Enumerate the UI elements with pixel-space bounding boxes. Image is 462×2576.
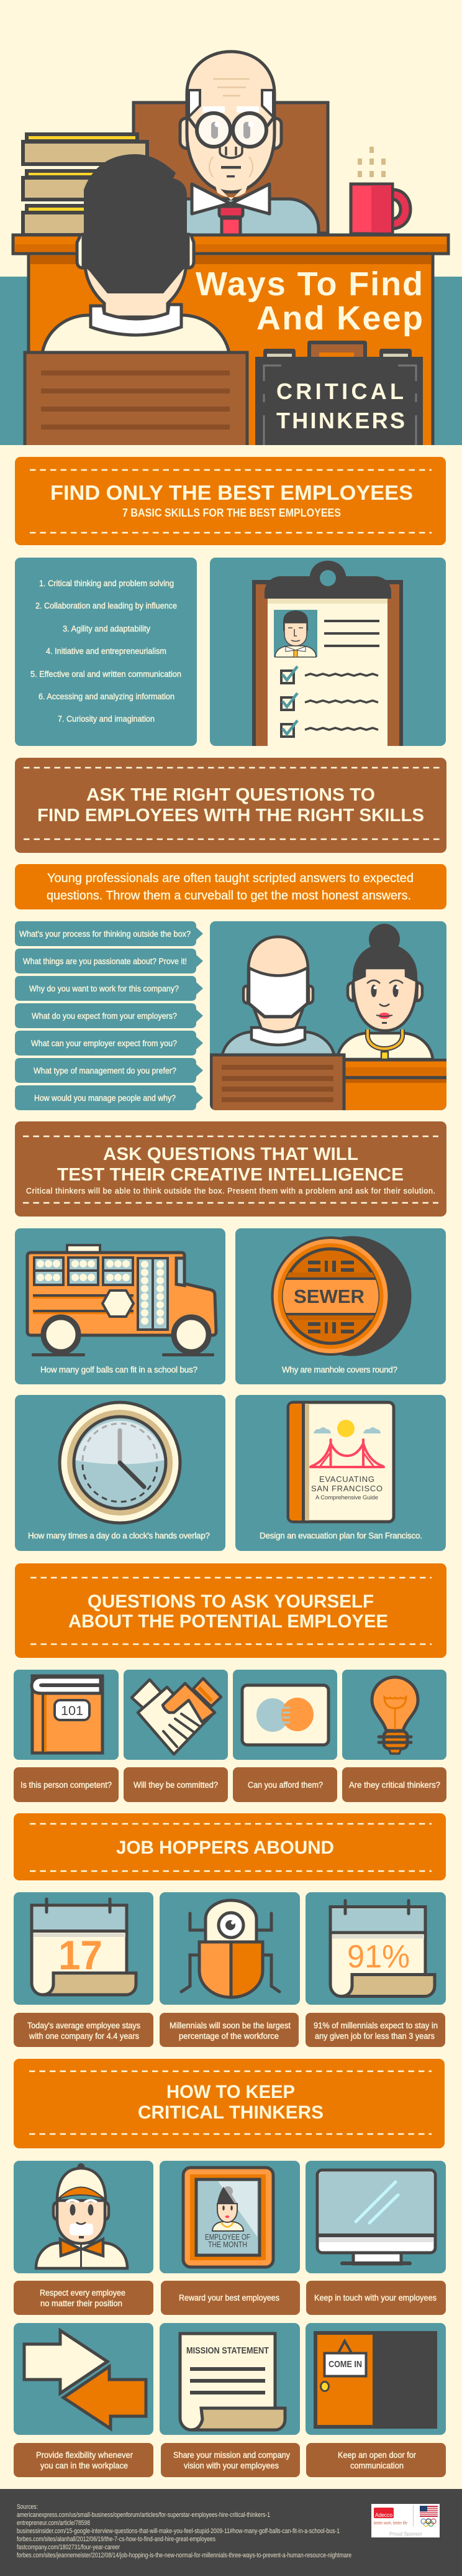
caption: Respect every employee xyxy=(40,2288,125,2298)
panel: seven skills list: 2. Collaboration and leading by influence xyxy=(35,601,177,610)
stat captions row xyxy=(14,2013,445,2047)
caption: Design an evacuation plan for San Francisco. xyxy=(260,1531,422,1540)
caption: with one company for 4.4 years xyxy=(29,2031,139,2041)
checklist xyxy=(281,666,378,737)
question bubble xyxy=(15,1031,203,1056)
icon: boss shirt xyxy=(183,199,319,235)
icon: candidate with bald head xyxy=(222,937,334,1055)
sources: forbes.com/sites/jeannemeister/2012/08/14/job-hopping-is-the-new-normal-for-millennials-three-ways-to-prevent-a-human-resource-nightmare xyxy=(17,2552,351,2559)
sponsor logo: better work, better life xyxy=(374,2521,407,2526)
heading: FIND ONLY THE BEST EMPLOYEES xyxy=(50,481,413,504)
caption xyxy=(14,1767,119,1802)
icon: clipboard clip xyxy=(265,561,391,599)
icon: interview desk xyxy=(345,1059,450,1111)
sources: fastcompany.com/1802731/four-year-career xyxy=(17,2544,120,2551)
icon: light bulb xyxy=(372,1677,418,1754)
question bubble: What's your process for thinking outside the box? xyxy=(19,929,191,939)
panel: school bus question xyxy=(15,1228,225,1384)
résumé lines xyxy=(324,620,379,647)
icon: guide book: A Comprehensive Guide xyxy=(315,1494,378,1501)
caption xyxy=(306,2281,446,2315)
callout: curveball: Young professionals are often taught scripted answers to expected xyxy=(47,872,414,885)
panel: clipboard xyxy=(210,558,446,748)
question list xyxy=(15,921,203,1110)
sources: forbes.com/sites/alanhall/2012/06/19/the-7-cs-how-to-find-and-hire-great-employees xyxy=(17,2536,215,2543)
caption: Millennials will soon be the largest xyxy=(170,2021,291,2030)
heading: ABOUT THE POTENTIAL EMPLOYEE xyxy=(68,1611,388,1632)
caption xyxy=(161,2443,300,2477)
sponsor logo: Adecco xyxy=(375,2512,392,2518)
callout: curveball xyxy=(15,864,446,909)
panel: clock question xyxy=(15,1395,225,1551)
subheading: 7 BASIC SKILLS FOR THE BEST EMPLOYEES xyxy=(122,507,341,519)
panel: critical thinkers bulb xyxy=(342,1670,446,1760)
question bubble: What type of management do you prefer? xyxy=(34,1066,176,1075)
icon: chair back xyxy=(211,1055,344,1112)
caption xyxy=(306,2443,446,2477)
question bubble xyxy=(15,949,203,973)
icon: employee of the month frame xyxy=(183,2168,273,2267)
heading: QUESTIONS TO ASK YOURSELF xyxy=(88,1591,374,1612)
panel: flexibility xyxy=(14,2323,153,2435)
icon: calendar: 17 xyxy=(58,1932,102,1978)
icon: employee of the month frame: THE MONTH xyxy=(208,2240,247,2249)
question bubble: What do you expect from your employers? xyxy=(32,1011,177,1021)
briefcase label xyxy=(276,379,405,433)
panel: respect xyxy=(14,2161,153,2273)
panel: seven skills list: 3. Agility and adaptability xyxy=(63,624,150,633)
panel: seven skills list: 7. Curiosity and imagination xyxy=(58,714,155,724)
panel: job hoppers abound xyxy=(14,1813,446,1880)
panel: seven skills list: 5. Effective oral and written communication xyxy=(30,669,181,679)
caption boxes row xyxy=(14,1767,446,1802)
sources: americanexpress.com/us/small-business/openforum/articles/for-superstar-employees-hire-critical-thinkers-1 xyxy=(17,2511,270,2519)
caption: Today's average employee stays xyxy=(27,2021,140,2030)
caption: Why are manhole covers round? xyxy=(282,1365,397,1374)
caption: Keep an open door for xyxy=(338,2450,416,2460)
icon: school bus xyxy=(27,1245,216,1356)
icon: candidate chair back xyxy=(25,352,247,452)
panel: find only the best employees xyxy=(15,457,446,545)
question bubble xyxy=(15,976,203,1001)
panel: afford xyxy=(233,1670,337,1760)
question bubble xyxy=(15,1058,203,1083)
caption: you can in the workplace xyxy=(40,2460,128,2470)
panel: ask the right questions xyxy=(15,758,446,853)
captions row xyxy=(14,2281,446,2315)
callout: curveball: questions. Throw them a curveball to get the most honest answers. xyxy=(47,889,411,903)
icon: guide book: SAN FRANCISCO xyxy=(311,1484,383,1493)
captions row xyxy=(14,2443,446,2477)
question bubble: How would you manage people and why? xyxy=(34,1093,176,1103)
panel: competent xyxy=(14,1670,119,1760)
caption: Are they critical thinkers? xyxy=(349,1780,440,1790)
caption xyxy=(161,2281,300,2315)
panel: calendar 91% xyxy=(306,1892,446,2005)
panel: reward xyxy=(160,2161,300,2273)
icon: boss chair xyxy=(134,103,328,233)
icon: calendar xyxy=(32,1899,136,1995)
question bubble: What things are you passionate about? Prove it! xyxy=(23,957,187,966)
caption: Reward your best employees xyxy=(179,2293,279,2302)
sources xyxy=(17,2503,351,2559)
sponsor logo: Proud Sponsor xyxy=(389,2531,422,2537)
heading xyxy=(37,785,424,826)
icon: 101 book xyxy=(32,1676,102,1753)
panel: san francisco question xyxy=(235,1395,446,1551)
icon: door with sign: COME IN xyxy=(328,2359,362,2370)
title xyxy=(196,265,423,337)
panel: seven skills list xyxy=(15,558,197,746)
sources: Sources: xyxy=(17,2503,38,2511)
heading xyxy=(57,1144,404,1185)
icon: briefcase xyxy=(255,341,423,445)
caption: Keep in touch with your employees xyxy=(314,2293,437,2302)
icon: woman interviewer xyxy=(337,924,433,1059)
caption xyxy=(14,2281,153,2315)
subheading: Critical thinkers will be able to think outside the box. Present them with a problem and ask for their solution. xyxy=(26,1187,435,1195)
icon: employee of the month frame: EMPLOYEE OF xyxy=(205,2233,250,2242)
icon: door with sign xyxy=(314,2331,437,2429)
icon: handshake xyxy=(132,1678,221,1754)
panel: questions to ask yourself xyxy=(15,1563,446,1658)
icon: desk xyxy=(13,235,448,453)
question bubble: Why do you want to work for this company? xyxy=(29,984,179,993)
icon: coffee mug xyxy=(351,147,410,234)
panel: mission xyxy=(160,2323,300,2435)
caption: percentage of the workforce xyxy=(179,2031,279,2041)
caption xyxy=(14,2013,153,2047)
panel: open door xyxy=(306,2323,446,2435)
panel: interview scene xyxy=(210,921,450,1112)
caption: Provide flexibility whenever xyxy=(36,2450,133,2460)
sponsor logo xyxy=(371,2504,440,2537)
panel: calendar 91%: 91% xyxy=(347,1939,410,1975)
caption: Is this person competent? xyxy=(20,1780,112,1790)
caption: Share your mission and company xyxy=(173,2450,290,2460)
icon: applicant photo xyxy=(274,610,317,657)
sources: businessinsider.com/15-google-interview-questions-that-will-make-you-feel-stupid-2009-11#how-many-golf-balls-can-fit-in-a-school-bus-1 xyxy=(17,2528,340,2535)
icon: mission statement scroll xyxy=(180,2334,285,2430)
caption: Can you afford them? xyxy=(248,1780,323,1790)
question bubble: What can your employer expect from you? xyxy=(31,1039,177,1048)
heading: FIND EMPLOYEES WITH THE RIGHT SKILLS xyxy=(37,806,424,826)
icon: boss head xyxy=(180,52,281,192)
caption xyxy=(342,1767,446,1802)
icon: worker with cap xyxy=(36,2163,127,2268)
panel: creative intelligence heading xyxy=(15,1121,446,1217)
icon: manhole cover xyxy=(271,1236,411,1356)
heading: ASK QUESTIONS THAT WILL xyxy=(103,1144,358,1164)
caption: Will they be committed? xyxy=(134,1780,218,1790)
heading: CRITICAL THINKERS xyxy=(138,2102,324,2123)
caption: any given job for less than 3 years xyxy=(315,2031,435,2041)
caption xyxy=(160,2013,299,2047)
icon: stack of books xyxy=(23,132,147,235)
panel: manhole question xyxy=(235,1228,446,1384)
panel: seven skills list: 6. Accessing and analyzing information xyxy=(38,692,174,701)
icon: guide book xyxy=(288,1402,394,1522)
icon: mission statement scroll: MISSION STATEMENT xyxy=(186,2346,269,2356)
panel: committed xyxy=(124,1670,228,1760)
icon: candidate hair xyxy=(84,154,187,293)
icon: computer monitor xyxy=(317,2170,435,2265)
icon: credit card xyxy=(242,1685,328,1745)
caption xyxy=(14,2443,153,2477)
briefcase label: CRITICAL xyxy=(276,379,404,404)
panel: millennial bug xyxy=(160,1892,300,2005)
panel: how to keep critical thinkers xyxy=(14,2059,445,2148)
sources: entrepreneur.com/article/78598 xyxy=(17,2519,90,2527)
question bubble xyxy=(15,921,203,946)
caption xyxy=(233,1767,337,1802)
heading: HOW TO KEEP xyxy=(166,2082,295,2102)
hero illustration xyxy=(0,52,462,453)
panel: keep in touch xyxy=(306,2161,446,2273)
heading xyxy=(138,2082,324,2123)
title: And Keep xyxy=(256,300,423,337)
icon: candidate from behind xyxy=(42,234,229,353)
heading: TEST THEIR CREATIVE INTELLIGENCE xyxy=(57,1165,404,1185)
panel: seven skills list: 1. Critical thinking and problem solving xyxy=(39,579,174,588)
icon: bug xyxy=(181,1900,279,1997)
icon: manhole cover: SEWER xyxy=(294,1286,365,1307)
briefcase label: THINKERS xyxy=(276,408,405,433)
heading xyxy=(68,1591,388,1632)
footer xyxy=(0,2489,462,2576)
panel: seven skills list: 4. Initiative and entrepreneurialism xyxy=(46,646,166,656)
icon: guide book: EVACUATING xyxy=(319,1474,374,1484)
question bubble xyxy=(15,1085,203,1110)
icon: calendar xyxy=(330,1901,435,1997)
caption: How many golf balls can fit in a school bus? xyxy=(40,1365,197,1374)
title: Ways To Find xyxy=(196,265,423,303)
caption xyxy=(124,1767,228,1802)
icon: arrows xyxy=(24,2330,146,2429)
heading: JOB HOPPERS ABOUND xyxy=(116,1838,334,1858)
caption: 91% of millennials expect to stay in xyxy=(314,2021,438,2030)
panel: calendar 17 xyxy=(14,1892,153,2005)
heading: ASK THE RIGHT QUESTIONS TO xyxy=(86,785,375,805)
caption: vision with your employees xyxy=(184,2460,279,2470)
caption xyxy=(306,2013,445,2047)
icon: clock xyxy=(60,1402,180,1523)
caption: communication xyxy=(350,2460,404,2470)
icon: 101 book: 101 xyxy=(61,1704,83,1718)
icon: bow collar and tie xyxy=(192,182,270,235)
caption: How many times a day do a clock's hands overlap? xyxy=(28,1531,210,1540)
question bubble xyxy=(15,1003,203,1028)
caption: no matter their position xyxy=(40,2299,122,2308)
